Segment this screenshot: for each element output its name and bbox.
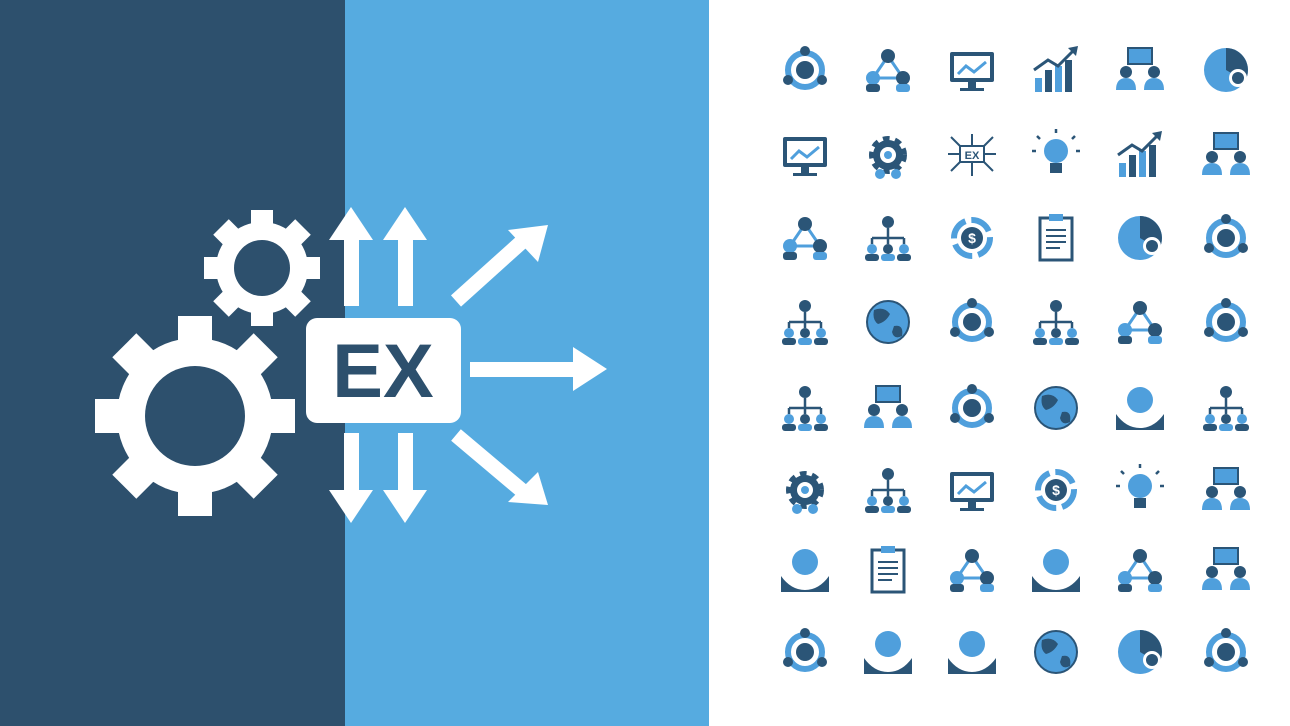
icon r1c2 bbox=[866, 49, 910, 92]
icon r7c5 bbox=[1118, 549, 1162, 592]
icon r5c1 bbox=[782, 386, 828, 431]
icon r2c6 bbox=[1202, 133, 1250, 175]
icon r6c5 bbox=[1116, 464, 1164, 508]
icon r7c1 bbox=[781, 549, 829, 592]
icon r3c4 bbox=[1040, 214, 1072, 260]
icon r3c5 bbox=[1118, 216, 1162, 260]
EX label box bbox=[306, 318, 461, 423]
icon r1c4 bbox=[1034, 46, 1078, 92]
icon r5c4 bbox=[1035, 387, 1077, 429]
icon r8c4 bbox=[1035, 631, 1077, 673]
panel: dark left background bbox=[0, 0, 345, 726]
icon r2c3 bbox=[948, 134, 996, 176]
icon r3c3 bbox=[954, 220, 990, 256]
icon r4c2 bbox=[867, 301, 909, 343]
icon r8c3 bbox=[948, 631, 996, 674]
icon r3c1 bbox=[783, 217, 827, 260]
icon r2c2 bbox=[873, 140, 903, 179]
icon r3c2 bbox=[865, 216, 911, 261]
icon r7c6 bbox=[1202, 548, 1250, 590]
arrows: radiating from EX bbox=[329, 207, 607, 523]
icon r4c6 bbox=[1204, 298, 1248, 339]
icon r4c3 bbox=[950, 298, 994, 339]
icon r2c5 bbox=[1118, 131, 1162, 177]
icon r1c1 bbox=[783, 46, 827, 87]
icon r5c5 bbox=[1116, 387, 1164, 430]
icon grid bbox=[781, 46, 1250, 674]
icon r6c3 bbox=[950, 472, 994, 511]
icon r6c2 bbox=[865, 468, 911, 513]
panel: light blue middle background bbox=[345, 0, 709, 726]
icon r6c1 bbox=[790, 475, 820, 514]
icon r1c6 bbox=[1204, 48, 1248, 92]
icon r4c4 bbox=[1033, 300, 1079, 345]
icon: large gear bbox=[95, 316, 295, 516]
EX label box: EX bbox=[332, 329, 434, 414]
icon r1c5 bbox=[1116, 48, 1164, 90]
icon r6c4 bbox=[1038, 472, 1074, 508]
icon r8c5 bbox=[1118, 630, 1162, 674]
icon r1c3 bbox=[950, 52, 994, 91]
icon r3c6 bbox=[1204, 214, 1248, 255]
icon r8c6 bbox=[1204, 628, 1248, 669]
icon: small gear bbox=[204, 210, 320, 326]
icon r5c2 bbox=[864, 386, 912, 428]
icon r8c2 bbox=[864, 631, 912, 674]
icon r4c1 bbox=[782, 300, 828, 345]
icon r6c6 bbox=[1202, 468, 1250, 510]
icon r2c3: EX bbox=[965, 150, 980, 162]
icon r2c1 bbox=[783, 137, 827, 176]
icon r7c4 bbox=[1032, 549, 1080, 592]
icon r2c4 bbox=[1032, 129, 1080, 173]
icon r8c1 bbox=[783, 628, 827, 669]
icon r7c3 bbox=[950, 549, 994, 592]
icon r7c2 bbox=[872, 546, 904, 592]
icon r5c6 bbox=[1203, 386, 1249, 431]
icon r5c3 bbox=[950, 384, 994, 425]
icon r4c5 bbox=[1118, 301, 1162, 344]
